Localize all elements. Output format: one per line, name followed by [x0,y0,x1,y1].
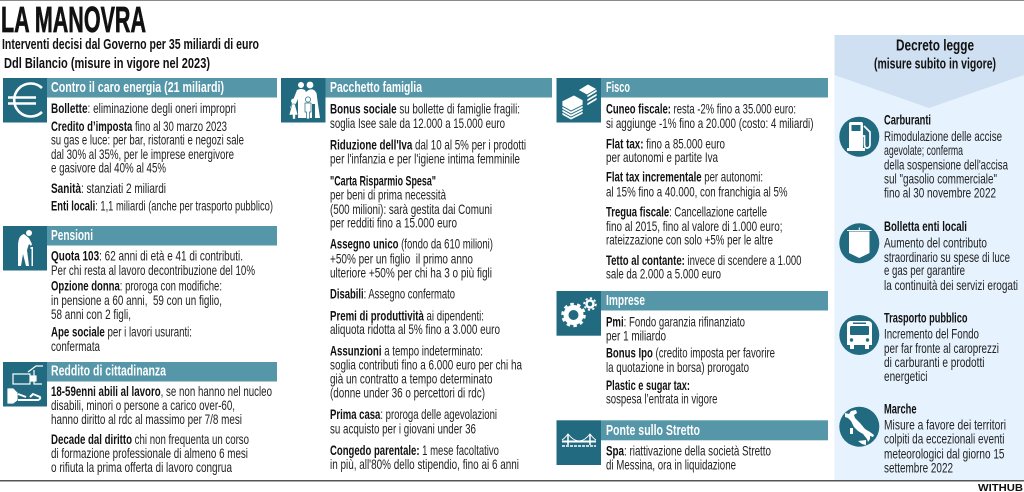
text: 18-59enni [51,384,272,427]
text: Assunzioni: già un contratto a tempo determinato [330,372,492,387]
text: Assunzioni: Assunzioni a tempo indeterminato: [330,343,483,358]
text: Credito d'imposta [51,119,244,176]
text: Flat tax: per autonomi e partite Iva [606,150,718,165]
text: Pmi: Pmi: Fondo garanzia rifinanziato [606,314,745,329]
text: Tregua fiscale: rateizzazione con solo +5% per le altre [606,233,773,248]
text: Plastic e sugar tax: Plastic e sugar tax: [606,378,690,393]
icon: fuel pump [839,117,879,157]
text: Ape sociale [51,325,192,354]
text: Assegno unico [330,236,493,280]
heading: Ponte sullo Stretto: Ponte sullo Stretto [606,422,700,439]
subtitle [2,36,259,72]
text: Sanità: Sanità: stanziati 2 miliardi [51,181,166,196]
heading: Decreto legge [874,38,996,72]
text: Assunzioni [330,343,522,401]
text: Premi di produttività: Premi di produttività ai dipendenti: [330,309,484,324]
text: Prima casa: su acquisto per i giovani under 36 [330,421,476,436]
item: Trasporto pubblico: energetici [884,369,928,384]
item: Bolletta enti locali: Bolletta enti locali [884,219,967,234]
text: Tregua fiscale: Tregua fiscale: Cancellazione cartelle [606,205,767,220]
text: Plastic e sugar tax: sospesa l’entrata in vigore [606,392,718,407]
panel: Pensioni [3,226,277,354]
text: Credito d'imposta: su gas e luce: per bar, ristoranti e negozi sale [51,133,244,148]
item: Bolletta enti locali: Aumento del contributo [884,235,987,250]
text: Opzione donna [51,279,222,322]
text: Opzione donna: 58 anni con 2 figli, [51,307,131,322]
text: Carta Risparmio Spesa [330,173,492,231]
text: Assunzioni: soglia contributi fino a 6.000 euro per chi ha [330,357,522,372]
text: Congedo parentale: Congedo parentale: 1 mese facoltativo [330,443,499,458]
text: Congedo parentale: in più, all'80% dello stipendio, fino ai 6 anni [330,457,519,472]
text: 18-59enni: hanno diritto al rdc al massimo per 7/8 mesi [51,412,242,427]
text: Tetto al contante: sale da 2.000 a 5.000 euro [606,266,721,281]
icon: elderly person [18,230,33,266]
panel: Fisco [556,78,828,281]
icon: gears [562,298,596,326]
text: Quota 103: Quota 103: 62 anni di età e 41 di contributi. [51,248,243,263]
item: Marche: Marche [884,401,917,416]
text: Prima casa: Prima casa: proroga delle agevolazioni [330,407,497,422]
text: Bonus Ipo: Bonus Ipo (credito imposta per favorire [606,346,775,361]
text: Enti locali: Enti locali: 1,1 miliardi (anche per trasporto pubblico) [51,199,273,214]
heading: Reddito di cittadinanza: Reddito di cittadinanza [51,363,166,380]
text: Assegno unico: Assegno unico (fondo da 610 milioni) [330,236,493,251]
text: Congedo parentale [330,443,519,472]
text: Cuneo fiscale: si aggiunge -1% fino a 20.000 (costo: 4 miliardi) [606,116,814,131]
text: Flat tax incrementale [606,170,788,199]
text: Ape sociale: Ape sociale per i lavori usuranti: [51,325,192,340]
chevron header [834,35,1024,108]
text: Spa: di Messina, ora in liquidazione [606,458,736,473]
text: 18-59enni: disabili, minori o persone a carico over-60, [51,398,235,413]
item: Bolletta enti locali: e gas per garantire [884,263,965,278]
icon: banner [839,223,879,263]
text: Decade dal diritto: di formazione professionale di almeno 6 mesi [51,446,248,461]
text: Decade dal diritto: Decade dal diritto chi non frequenta un corso [51,432,249,447]
text: Spa [606,444,771,473]
text: Tetto al contante: Tetto al contante: invece di scendere a 1.000 [606,253,802,268]
heading: Pacchetto famiglia: Pacchetto famiglia [330,79,422,96]
text: Quota 103: Per chi resta al lavoro decontribuzione del 10% [51,263,255,278]
text: Tregua fiscale [606,205,782,248]
panel: Reddito di cittadinanza [3,362,277,475]
panel: Imprese [556,291,828,407]
subtitle: Ddl Bilancio (misure in vigore nel 2023) [4,55,210,72]
text: Premi di produttività [330,309,500,337]
item: Trasporto pubblico: Trasporto pubblico [884,310,968,325]
text: Assunzioni: (donne under 36 o percettori di rdc) [330,386,485,401]
item: Trasporto pubblico: Incremento del Fondo [884,326,979,341]
text: Assegno unico: +50% per un figlio il primo anno [330,251,473,266]
subtitle: Interventi decisi dal Governo per 35 miliardi di euro [2,36,259,53]
text: Cuneo fiscale [606,101,814,131]
text: Carta Risparmio Spesa: "Carta Risparmio Spesa" [330,173,436,188]
item: Marche: settembre 2022 [884,460,953,475]
item: Carburanti [884,112,1008,201]
text: Premi di produttività: aliquota ridotta al 5% fino a 3.000 euro [330,322,500,337]
title: LA MANOVRA [1,0,146,40]
text: Prima casa [330,407,497,436]
text: Bonus sociale: Bonus sociale su bollette di famiglie fragili: [330,101,520,116]
text: Bonus sociale [330,101,520,131]
text: Flat tax: Flat tax: fino a 85.000 euro [606,136,725,151]
icon: family [289,82,320,119]
heading: Pensioni: Pensioni [51,227,93,244]
text: Bonus Ipo: la quotazione in borsa) prorogato [606,360,749,375]
item: Marche [884,401,1006,475]
text: Carta Risparmio Spesa: (500 milioni): sarà gestita dai Comuni [330,202,492,217]
panel: Decreto legge [834,35,1024,480]
icon: hand and card [8,366,43,403]
text: Disabili: Disabili: Assegno confermato [330,287,455,302]
text: 18-59enni: 18-59enni abili al lavoro, se non hanno nel nucleo [51,384,272,399]
text: Opzione donna: Opzione donna: proroga con modifiche: [51,279,222,294]
text: Decade dal diritto: o rifiuta la prima offerta di lavoro congrua [51,460,232,475]
text: Decade dal diritto [51,432,249,475]
icon: Italy map [839,407,879,447]
text: Carta Risparmio Spesa: per redditi fino a 15.000 euro [330,216,457,231]
text: Riduzione dell'Iva: Riduzione dell'Iva dal 10 al 5% per i prodotti [330,137,526,152]
panel: Pacchetto famiglia [281,78,552,472]
text: Pmi: per 1 miliardo [606,329,666,344]
text: Bonus Ipo [606,346,775,375]
text: Bonus sociale: soglia Isee sale da 12.000 a 15.000 euro [330,116,505,131]
text: Plastic e sugar tax [606,378,718,407]
text: Riduzione dell'Iva [330,137,526,166]
text: Riduzione dell'Iva: per l'infanzia e per l'igiene intima femminile [330,151,520,166]
text: Quota 103 [51,248,255,278]
heading: Imprese: Imprese [606,292,645,309]
item: Carburanti: Carburanti [884,112,931,127]
text: Tregua fiscale: fino al 2015, fino al valore di 1.000 euro; [606,219,782,234]
text: Spa: Spa: riattivazione della società Stretto [606,444,771,459]
text: Opzione donna: in pensione a 60 anni, 59 con un figlio, [51,293,222,308]
heading: Decreto legge: Decreto legge [896,38,974,55]
heading: Fisco: Fisco [606,79,630,96]
text: Ape sociale: confermata [51,339,100,354]
item: Trasporto pubblico [884,310,999,384]
panel: Ponte sullo Stretto [556,420,828,473]
panel: Contro il caro energia [3,78,277,214]
text: Credito d'imposta: Credito d’imposta fino al 30 marzo 2023 [51,119,227,134]
text: Flat tax incrementale: Flat tax incrementale per autonomi: [606,170,763,185]
text: Assegno unico: ulteriore +50% per chi ha 3 o più figli [330,265,492,280]
icon: paper stacks [562,84,597,120]
icon: bridge [562,434,596,446]
text: Carta Risparmio Spesa: per beni di prima necessità [330,187,446,202]
text: Credito d'imposta: dal 30% al 35%, per le imprese energivore [51,147,234,162]
text: Credito d'imposta: e gasivore dal 40% al 45% [51,161,166,176]
icon: bus [839,315,879,355]
text: Flat tax incrementale: al 15% fino a 40.000, con franchigia al 5% [606,184,788,199]
item: Carburanti: agevolate; conferma [884,143,963,158]
icon: euro [8,83,42,116]
text: Pmi [606,314,745,344]
heading: Contro il caro energia: Contro il caro energia (21 miliardi) [51,79,224,96]
item: Bolletta enti locali [884,219,1018,293]
text: Bollette: Bollette: eliminazione degli oneri impropri [51,101,236,116]
text: Flat tax [606,136,725,165]
text: Cuneo fiscale: Cuneo fiscale: resta -2% fino a 35.000 euro: [606,101,796,116]
item: Trasporto pubblico: di carburanti e prodotti [884,355,984,370]
text: Tetto al contante [606,253,802,281]
